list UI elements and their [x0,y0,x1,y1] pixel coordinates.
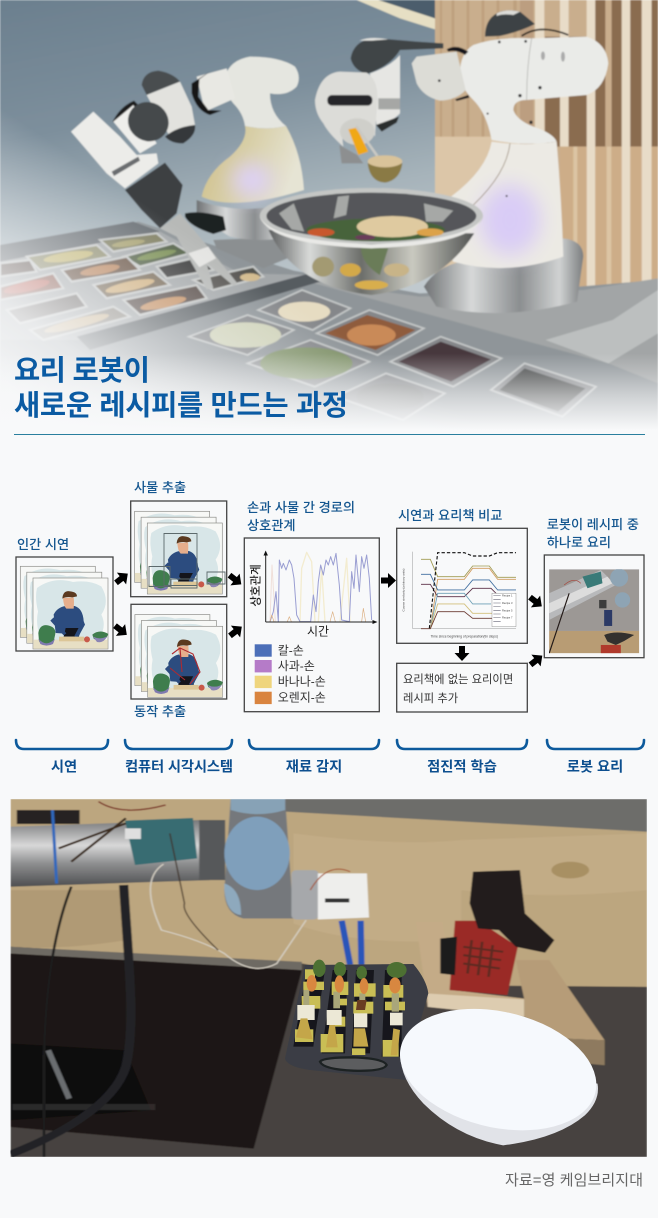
arrow: add recipe to robot [526,650,547,671]
recipe line chart [401,552,516,638]
induction cooktop [10,953,302,1149]
stage bracket: demonstration: 시연 [51,758,77,776]
cutting board with ingredients [285,960,428,1080]
step 1: human demonstration [16,537,113,651]
step 4: recipe comparison panel: 시연과 요리책 비교 [398,508,502,523]
white bowl [400,1008,598,1146]
legend: 칼-손 [278,644,304,658]
title: 요리 로봇이 [14,355,150,387]
step 2b: motion extraction: 동작 추출 [134,704,186,719]
recipe line chart: Recipe 7 [502,616,513,620]
hero photo: cooking robots over ingredient trays [0,0,658,453]
source credit: 자료=영 케임브리지대 [505,1172,643,1189]
step 4: recipe comparison panel [397,508,527,643]
stage bracket: demonstration [16,740,108,776]
dark counter [10,947,647,1157]
arrow: object to correlation [225,569,246,590]
step 2b: motion extraction [131,604,227,719]
bottom photo: lab robot arm with salad ingredients [10,799,647,1157]
recipe line chart: Time since beginning of preparation(tin steps) [431,634,498,638]
title [14,355,348,422]
recipe line chart: Recipe 1 [502,594,513,598]
stage bracket: robot cooking: 로봇 요리 [567,758,623,776]
title: 새로운 레시피를 만드는 과정 [14,390,348,422]
step 2a: object extraction [131,480,227,597]
left tray block [0,222,320,350]
arrow: comparison to add recipe [454,646,470,661]
plywood wall [10,799,647,999]
wooden steps [416,922,524,1017]
stage bracket: ingredient sensing: 재료 감지 [286,758,342,776]
stage bracket: computer vision [125,740,233,776]
step 3: correlation panel [244,500,379,712]
legend: 사과-손 [278,659,315,673]
cables [44,887,71,1157]
step 2a: object extraction: 사물 추출 [134,480,186,495]
callout: add recipe: 레시피 추가 [403,692,459,705]
step 3: correlation panel: 손과 사물 간 경로의 [247,500,355,515]
stage bracket: ingredient sensing [249,740,379,776]
white gripper box [318,873,369,919]
step 5: robot cooks panel: 하나로 요리 [547,535,611,550]
wall and wood backdrop [0,0,658,333]
red cutter with black handle [450,921,518,995]
rear robot arm [71,57,304,289]
stage bracket: incremental learning: 점진적 학습 [427,758,497,776]
stage bracket: robot cooking [547,740,644,776]
callout: add recipe: 요리책에 없는 요리이면 [403,672,513,686]
step 3: correlation panel: 상호관계 [247,518,296,533]
recipe line chart: Recipe 3 [502,601,513,605]
recipe line chart: Course similarity (arbitrary units) [401,569,405,611]
step 1: human demonstration: 인간 시연 [17,537,69,552]
step 5: robot cooks panel [544,517,644,658]
recipe line chart: Recipe 5 [502,608,513,612]
legend [255,644,326,704]
arrow: motion to correlation [225,621,246,642]
control board [125,818,197,865]
arrow: demo to motion [110,620,131,641]
front robot arm [315,10,608,313]
steel salad bowl [260,188,483,295]
correlation line chart: 시간 [307,624,329,638]
legend: 바나나-손 [278,674,326,688]
stage bracket: computer vision: 컴퓨터 시각시스템 [125,758,233,776]
robot joints [224,799,294,918]
robot thumbnail photo [549,569,640,654]
arrow: comparison to robot [525,591,546,612]
correlation line chart [248,550,378,638]
arrow: correlation to comparison [381,573,396,588]
correlation line chart: 상호관계 [248,564,262,607]
arm tube [10,820,210,887]
arrow: demo to object [111,568,132,589]
legend: 오렌지-손 [278,690,326,704]
callout: add recipe [397,663,527,712]
white fade [0,0,658,453]
steel counter and trays [0,222,658,440]
stage bracket: incremental learning [397,740,527,776]
step 5: robot cooks panel: 로봇이 레시피 중 [547,517,639,532]
